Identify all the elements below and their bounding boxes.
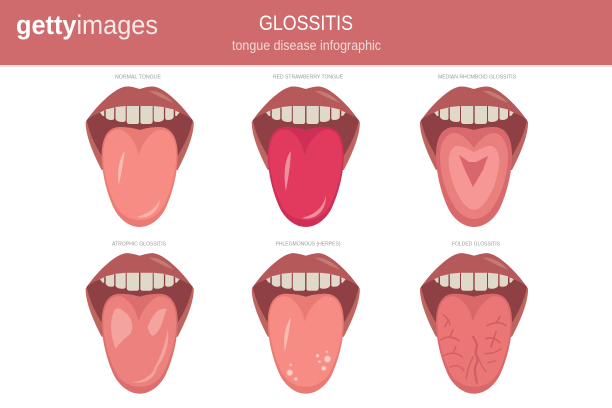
label: red strawberry tongue: RED STRAWBERRY TONGUE (273, 74, 344, 80)
illustration: median rhomboid glossitis (420, 86, 528, 227)
label: folded glossitis: FOLDED GLOSSITIS (452, 242, 501, 248)
logo: gettyimages: gettyimages (16, 10, 158, 40)
label: median rhomboid glossitis: MEDIAN RHOMBOID GLOSSITIS (438, 74, 517, 80)
label: phlegmonous (herpes): PHLEGMONOUS (HERPES) (276, 242, 341, 248)
panel: red strawberry tongue (252, 74, 360, 227)
header banner (0, 0, 612, 67)
panel: median rhomboid glossitis (420, 74, 528, 227)
label: normal tongue: NORMAL TONGUE (115, 74, 162, 80)
label: atrophic glossitis: ATROPHIC GLOSSITIS (112, 242, 167, 248)
panel: folded glossitis (420, 242, 528, 394)
subtitle: tongue disease infographic (232, 37, 381, 53)
title: GLOSSITIS (259, 12, 353, 35)
panel: normal tongue (86, 74, 194, 227)
illustration: phlegmonous tongue with blisters (252, 253, 360, 394)
illustration: red strawberry tongue (252, 86, 360, 227)
illustration: normal tongue (86, 86, 194, 227)
blisters (287, 350, 331, 381)
illustration: atrophic glossitis (86, 253, 194, 394)
panel: atrophic glossitis (86, 242, 194, 394)
panel: phlegmonous (herpes) (252, 242, 360, 394)
fissures (441, 315, 506, 383)
illustration: folded tongue (420, 253, 528, 394)
